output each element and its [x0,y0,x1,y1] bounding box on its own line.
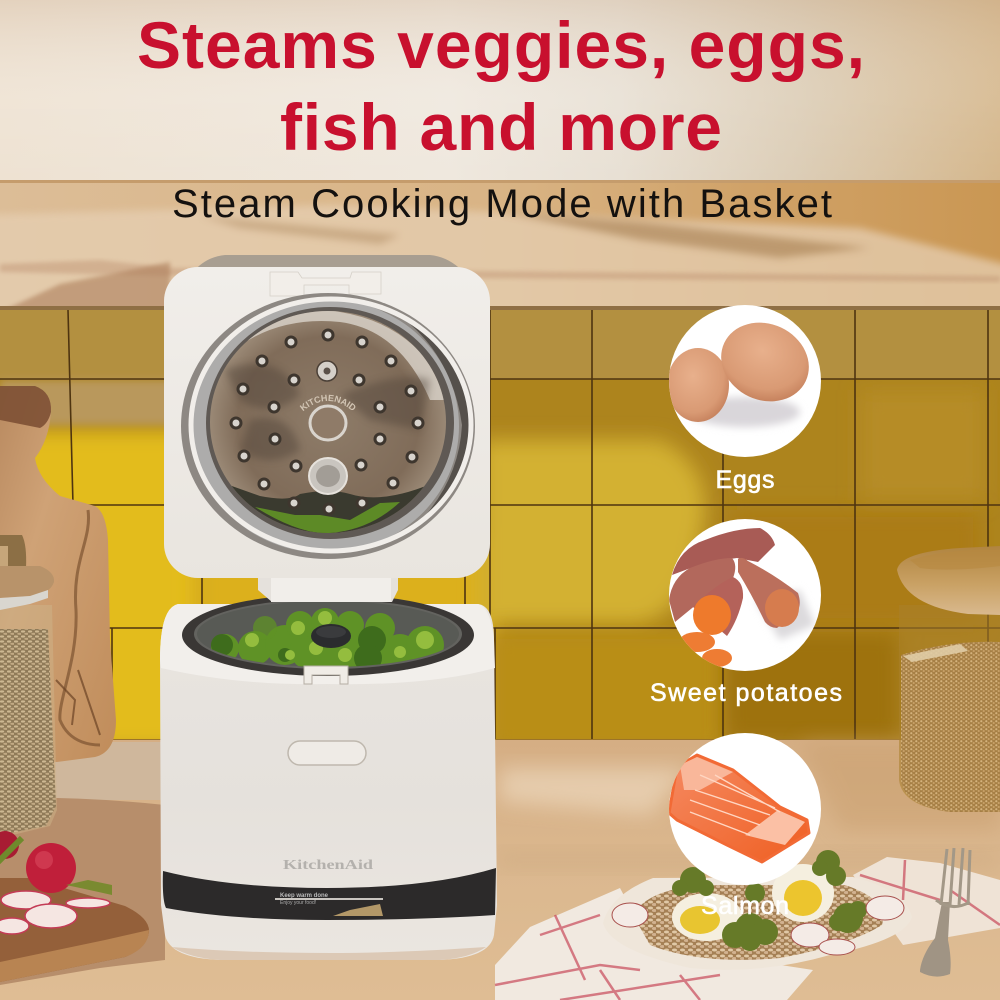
wooden counter [0,740,1000,1000]
radish board [0,831,149,982]
background wall [0,0,1000,182]
icon: radish [0,831,112,895]
title [137,8,865,164]
broccoli on plate [672,850,867,951]
title: fish and more [280,90,722,164]
silver lid edge [182,255,482,300]
lid panel [164,267,490,578]
checked towel [495,857,1000,1000]
display band: Keep warm done [280,893,329,899]
steamer basket and broccoli [182,594,474,676]
fork [920,848,970,977]
label: eggs: Eggs [716,466,774,494]
valve [317,361,337,381]
brand wordmark: KitchenAid [283,858,373,873]
rice cooker open lid [164,255,490,602]
radish slices [0,891,110,934]
label: sweet potatoes: Sweet potatoes [650,679,842,707]
mesh steam vent [309,458,347,494]
food item: salmon [669,733,821,885]
embossed logo: KITCHENAID [300,394,356,411]
title: Steams veggies, eggs, [137,8,865,82]
hinge [258,560,398,602]
latch clip [304,666,348,684]
display band: Enjoy your food! [280,900,316,906]
radish slices on plate [612,896,904,955]
left glass jar of grains [0,535,57,838]
display band [163,868,496,920]
eggs on plate [672,893,742,941]
tiled wall [0,310,1000,752]
cutting board behind left jar [0,386,116,762]
plate center ring [310,406,346,440]
plate of rice and broccoli [495,848,1000,1000]
base body [160,604,497,960]
gasket and steel plate [181,293,475,559]
food item: sweet potatoes [669,519,821,671]
dimples [231,330,423,514]
label: salmon: Salmon [701,892,789,920]
food item: eggs [667,305,822,457]
wooden shelf [0,180,1000,310]
right glass jar of grains [897,546,1000,812]
subtitle: Steam Cooking Mode with Basket [172,182,832,226]
rice cooker base [160,594,497,960]
handle [288,741,366,765]
plate [603,877,912,970]
